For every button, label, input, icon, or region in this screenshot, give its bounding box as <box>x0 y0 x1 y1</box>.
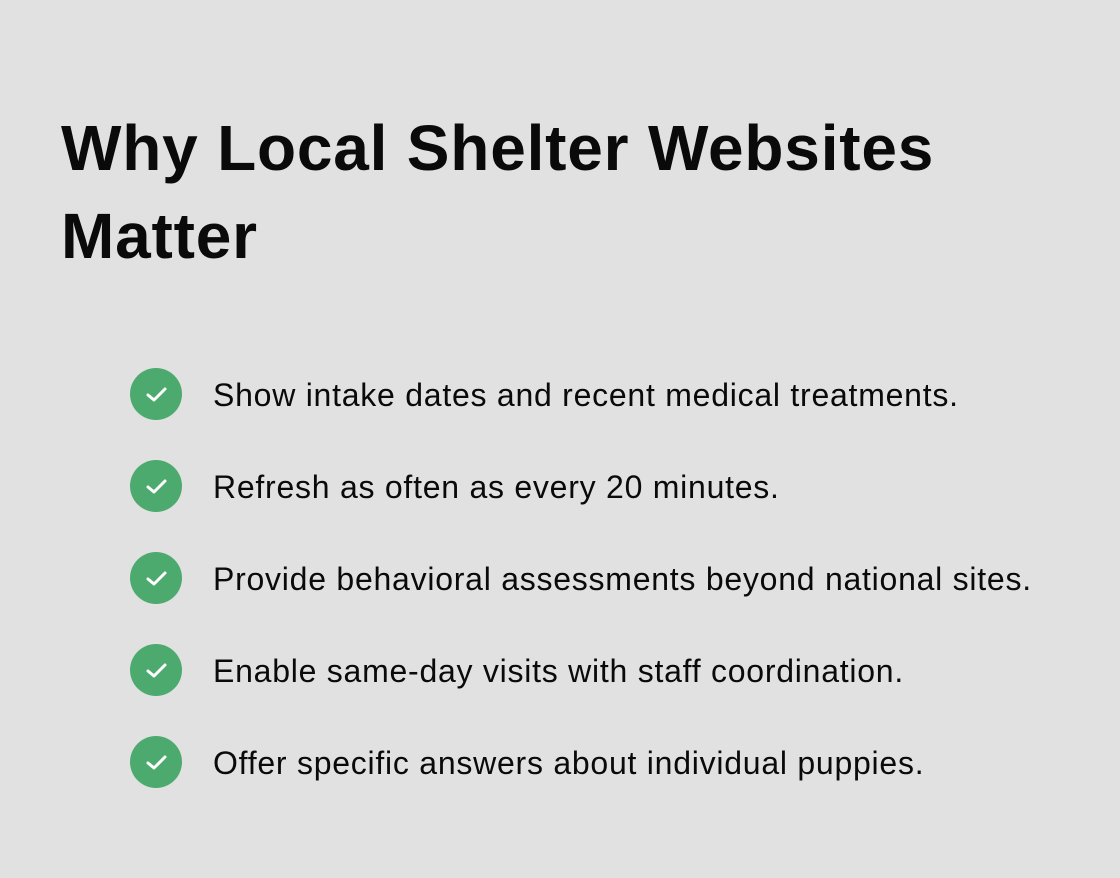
title: Matter <box>61 200 258 272</box>
item 5 <box>130 736 924 788</box>
icon: check <box>130 644 182 696</box>
item 1 <box>130 368 959 420</box>
title: Why Local Shelter Websites <box>61 112 934 184</box>
text: Provide behavioral assessments beyond national sites. <box>213 561 1032 597</box>
title <box>61 112 934 272</box>
icon: check <box>130 552 182 604</box>
icon: check <box>130 736 182 788</box>
item 4 <box>130 644 904 696</box>
item 3 <box>130 552 1032 604</box>
text: Enable same-day visits with staff coordination. <box>213 653 904 689</box>
text: Refresh as often as every 20 minutes. <box>213 469 780 505</box>
text: Show intake dates and recent medical treatments. <box>213 377 959 413</box>
text: Offer specific answers about individual puppies. <box>213 745 924 781</box>
item 2 <box>130 460 780 512</box>
icon: check <box>130 368 182 420</box>
icon: check <box>130 460 182 512</box>
